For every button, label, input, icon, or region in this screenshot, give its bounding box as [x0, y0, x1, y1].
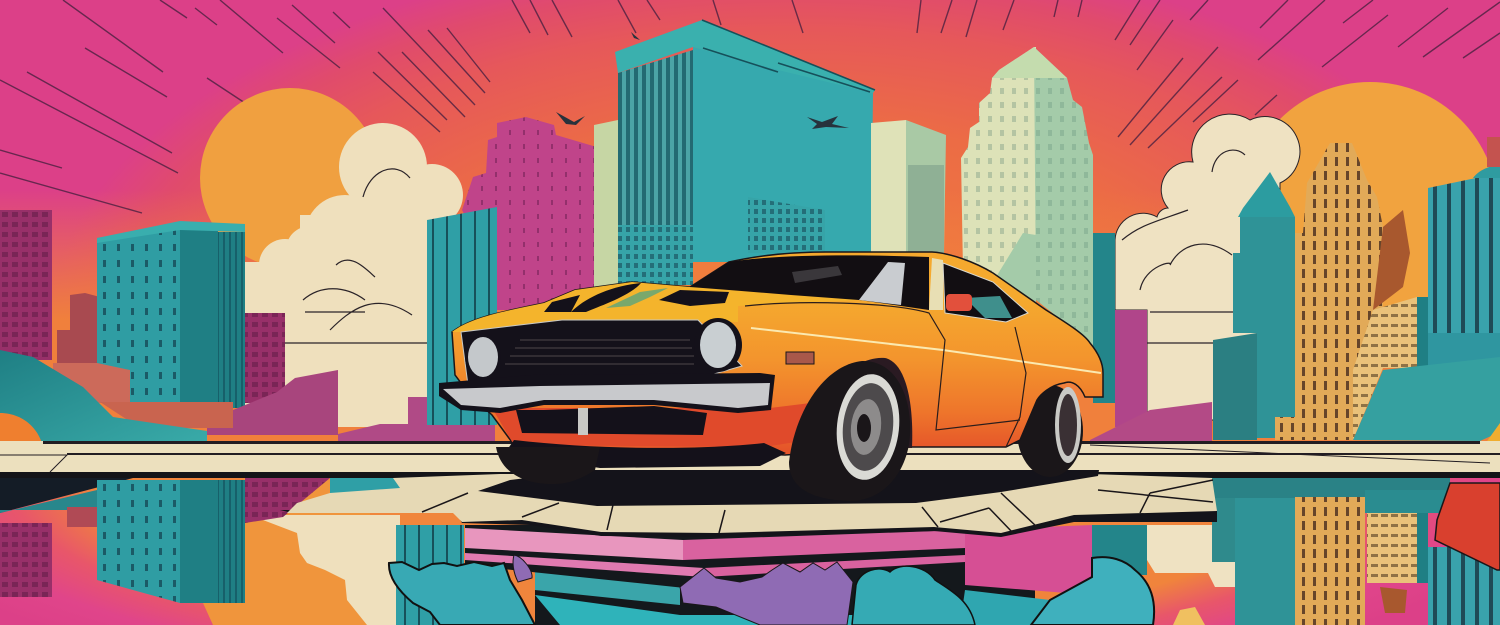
building: gold art-deco tower: [1275, 143, 1417, 440]
cloud outlines: right: [1122, 150, 1245, 343]
cloud: left: [245, 123, 463, 427]
side window: [943, 263, 1028, 322]
front-left wheel: [496, 447, 600, 484]
teal hand: centre: [852, 566, 975, 625]
front red fender: [492, 400, 835, 447]
hood green reflection: [606, 288, 668, 308]
window teal reflection: [965, 296, 1012, 318]
reflected teal column: [330, 478, 1147, 625]
reflected sun: left: [200, 478, 370, 625]
reflected building: far left magenta: [0, 523, 52, 597]
low salmon base: [100, 402, 233, 428]
building: teal left tower: [97, 221, 245, 408]
building: big teal tower: [615, 20, 875, 285]
reflection pool: [0, 478, 1500, 625]
comic speed lines: [0, 0, 1500, 213]
body crease and doors: [751, 328, 1101, 373]
low magenta roofs centre: [338, 397, 495, 441]
narrow cream tower: [594, 120, 618, 290]
grille slats: [505, 340, 694, 364]
grille: [461, 320, 742, 385]
red reflection: [1435, 483, 1500, 570]
stone platform: [280, 474, 1217, 537]
wing mirror: [946, 294, 972, 311]
lower body lip: [505, 440, 786, 468]
low magenta right: [1090, 402, 1212, 441]
windshield highlight: [859, 262, 905, 305]
right foreground hill: [1353, 357, 1500, 441]
intake chrome: [578, 408, 588, 435]
reflected teal towers: right: [1212, 478, 1450, 625]
reflected teal right tower: [1428, 547, 1500, 625]
right headlight: [694, 318, 742, 372]
front-right wheel: [789, 361, 910, 501]
building: salmon low block: [53, 363, 131, 403]
reflected brown block: [67, 507, 99, 527]
building: far left magenta: [0, 210, 52, 360]
rear wheel: [1017, 385, 1083, 477]
reflected magenta block: [245, 478, 330, 523]
cream skyscraper: [961, 47, 1093, 345]
yellow hood: [452, 282, 859, 332]
side marker: [786, 352, 814, 364]
background sky: [0, 0, 1500, 480]
side pillar: [929, 258, 943, 310]
low magenta roofs left: [207, 370, 338, 435]
purple hands: [513, 555, 853, 625]
building: teal right tower: [1417, 137, 1500, 368]
cloud: right: [1115, 114, 1300, 420]
building: teal mid-left tower: [427, 207, 497, 425]
reflected hill wedge: [0, 478, 133, 513]
teal hand: right: [1031, 557, 1154, 625]
magenta block under platform: [965, 525, 1092, 595]
reflected teal wedge: [0, 490, 97, 513]
cream mid tower: [871, 120, 946, 253]
hood scoops: [544, 283, 729, 312]
car body: [452, 252, 1103, 455]
magenta tower: [462, 117, 600, 310]
planes: [556, 32, 849, 129]
reflected cloud: right: [1147, 525, 1235, 587]
wheel arch: [808, 358, 912, 448]
left headlight: [465, 333, 501, 381]
car shadow: [478, 470, 1099, 506]
teal right stripes and magenta block: [1093, 233, 1147, 427]
teal hand: left: [389, 562, 535, 625]
lower intake: [516, 406, 707, 435]
cloud outlines: left: [285, 169, 427, 343]
small yellow reflection: [1173, 607, 1205, 625]
reflected gold tower: [1295, 497, 1417, 625]
reflected cloud: left: [263, 515, 400, 625]
muscle car: [439, 252, 1103, 501]
rear-view mirror: [792, 266, 842, 283]
building: brown low block: [57, 293, 100, 365]
pink plinth: [465, 525, 965, 590]
door outlines: [745, 303, 1026, 447]
sun: right: [1242, 82, 1498, 338]
reflected teal tower: [97, 480, 245, 603]
building: teal spire tower: [1213, 172, 1295, 440]
teal plinth base: [535, 570, 1050, 625]
chrome bumper: [439, 373, 775, 413]
windshield: [690, 255, 929, 310]
left foreground hill: [0, 350, 207, 441]
building: small magenta block: [245, 313, 285, 403]
orange shell: [0, 413, 44, 455]
road: [0, 441, 1500, 478]
sun: left: [200, 88, 380, 268]
yellow shape: [1475, 423, 1500, 460]
